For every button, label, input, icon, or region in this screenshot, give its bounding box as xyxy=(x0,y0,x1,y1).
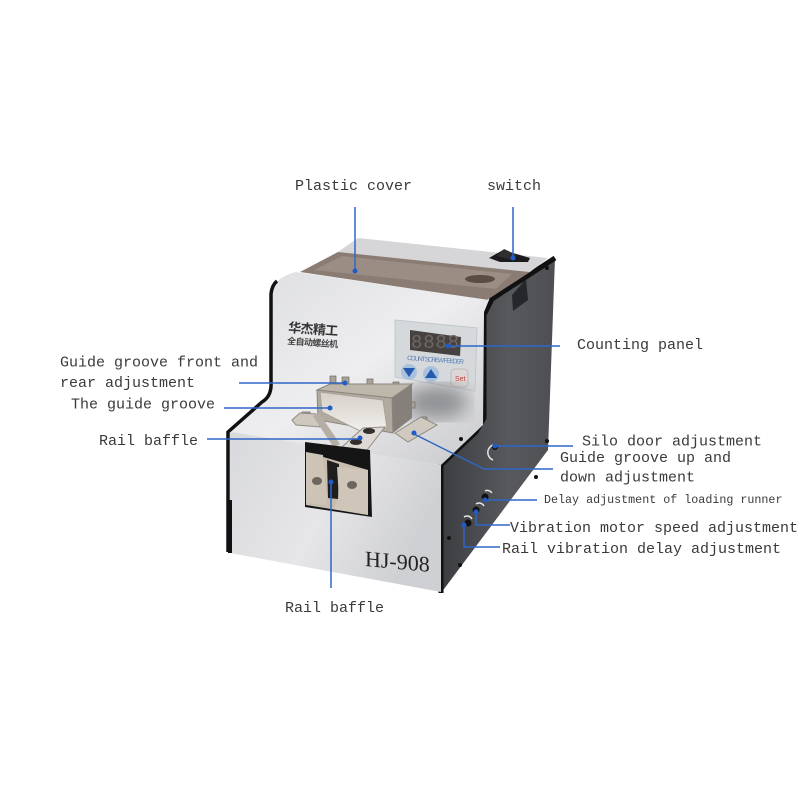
guide plate xyxy=(320,392,387,431)
label: Guide groove up and down adjustment: Guide groove up and xyxy=(560,450,731,467)
rear latch xyxy=(512,279,528,311)
label: Silo door adjustment xyxy=(492,434,762,450)
label: Rail baffle bottom: Rail baffle xyxy=(285,600,384,617)
guide groove assembly xyxy=(292,376,437,450)
model label: HJ-908 xyxy=(365,546,430,577)
rail baffle block xyxy=(305,442,372,517)
label: Rail baffle left xyxy=(99,433,362,450)
label: Silo door adjustment: Silo door adjustment xyxy=(582,434,762,450)
machine body: 全自动螺丝机 xyxy=(287,334,339,351)
label: Counting panel xyxy=(446,337,703,354)
label: Rail vibration delay adjustment: Rail vibration delay adjustment xyxy=(502,541,781,558)
chute xyxy=(313,413,340,448)
label: Guide groove front and rear adjustment xyxy=(60,354,348,392)
label: Guide groove up and down adjustment: down adjustment xyxy=(560,470,695,486)
label: switch xyxy=(487,178,541,260)
label: Rail baffle bottom xyxy=(285,480,384,617)
left foot xyxy=(292,413,320,427)
label: Delay adjustment of loading runner: Delay adjustment of loading runner xyxy=(544,493,782,507)
counting panel: 8888 xyxy=(411,332,459,354)
label: Guide groove front and rear adjustment: rear adjustment xyxy=(60,375,195,392)
label: Guide groove front and rear adjustment: Guide groove front and xyxy=(60,354,258,372)
lower front panel xyxy=(230,432,441,592)
label: Rail vibration delay adjustment xyxy=(462,522,781,558)
lower left black edge xyxy=(228,500,232,553)
upper front panel xyxy=(228,272,489,465)
label: Vibration motor speed adjustment: Vibration motor speed adjustment xyxy=(510,520,798,537)
rocker switch xyxy=(489,249,530,262)
side ports xyxy=(464,445,493,519)
label: Guide groove up and down adjustment xyxy=(412,430,731,486)
label: Plastic cover xyxy=(295,178,412,274)
label: Rail baffle left: Rail baffle xyxy=(99,433,198,450)
machine body xyxy=(228,238,555,593)
bracket xyxy=(317,384,412,398)
counting panel: COUNT SCREW FEEDER xyxy=(407,355,465,366)
label: The guide groove xyxy=(71,396,332,414)
counting panel xyxy=(395,320,477,391)
right side panel xyxy=(441,258,555,593)
right bracket xyxy=(395,417,437,442)
counting panel: Set xyxy=(455,376,466,383)
label: Vibration motor speed adjustment xyxy=(474,510,798,537)
label: The guide groove: The guide groove xyxy=(71,396,215,414)
shadow behind guide xyxy=(404,385,468,419)
label: Counting panel: Counting panel xyxy=(577,337,703,354)
label: switch: switch xyxy=(487,178,541,195)
adjustment screws xyxy=(302,376,427,426)
brand text: 华杰精工 xyxy=(288,317,339,339)
plastic cover xyxy=(300,252,530,300)
label: Plastic cover: Plastic cover xyxy=(295,178,412,195)
top plate xyxy=(338,238,548,272)
